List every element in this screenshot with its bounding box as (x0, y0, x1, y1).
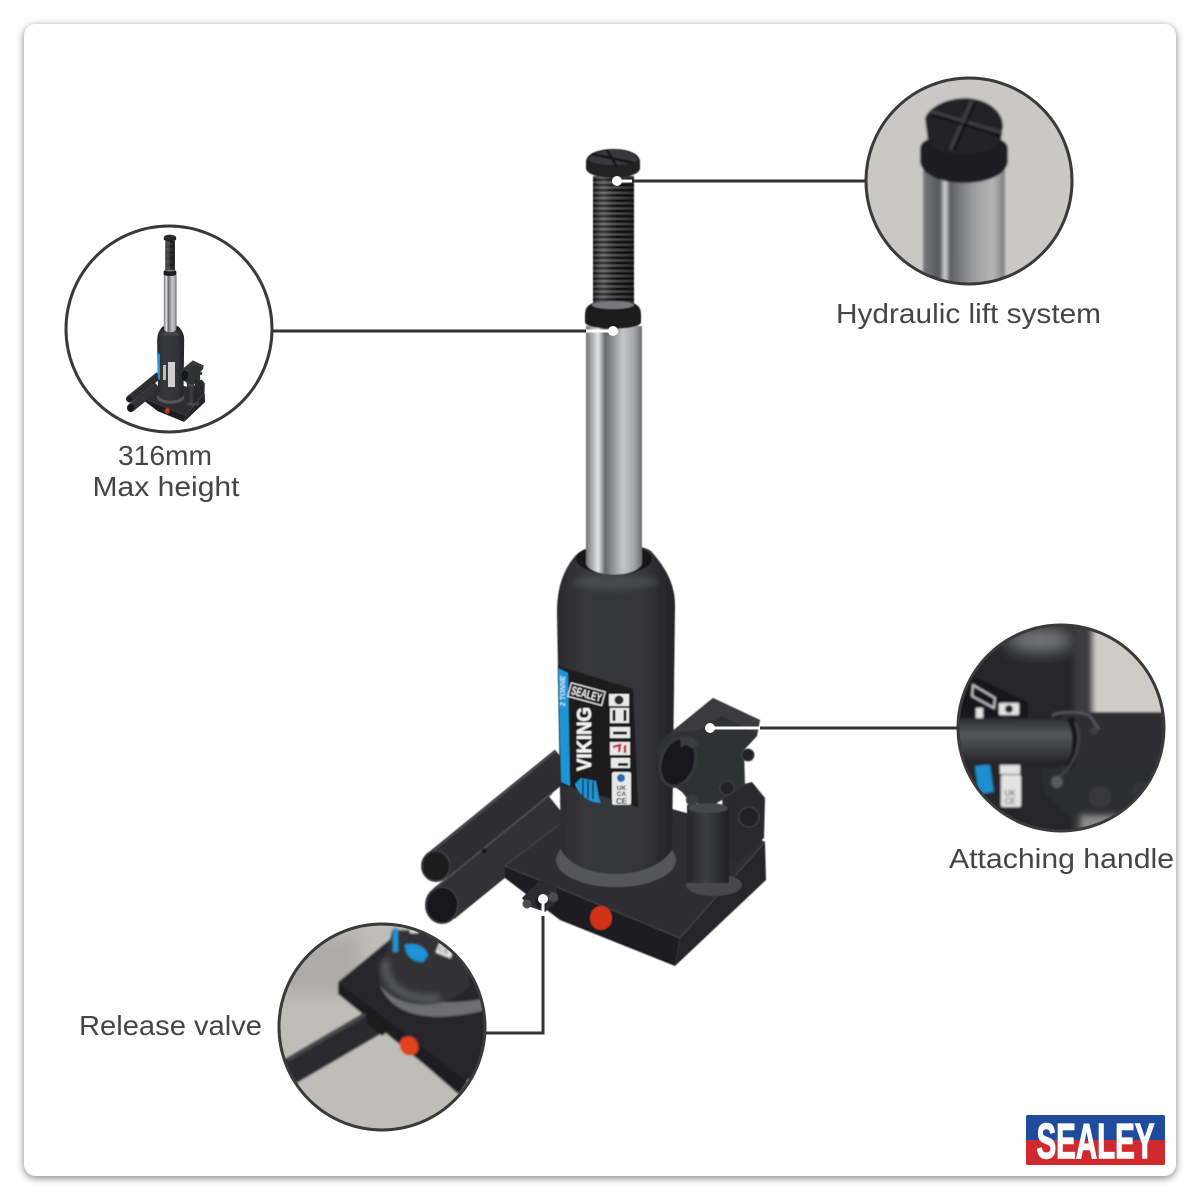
weld ring (556, 833, 676, 887)
base plate (505, 800, 766, 966)
handle tube (289, 1020, 378, 1072)
safety icons: CA (617, 791, 626, 798)
body shoulder highlight (574, 574, 658, 590)
handle socket (657, 698, 760, 806)
safety icons (609, 694, 631, 806)
side link (722, 782, 765, 862)
pump cylinder (687, 805, 729, 883)
zoom circle: release valve (280, 926, 484, 1128)
connector line (618, 180, 866, 182)
small pin (686, 794, 698, 806)
callout: hydraulic lift system (612, 70, 1080, 290)
VIKING logo: VIKING (574, 707, 596, 771)
pivot bolts (720, 749, 759, 827)
marker dot (538, 894, 548, 904)
SEALEY sticker logo: SEALEY (570, 683, 603, 705)
zoom circle: handle socket (960, 626, 1162, 830)
safety icons: UK (617, 785, 626, 792)
jack label (558, 666, 638, 807)
marker dot (608, 326, 618, 336)
safety icons: CE (616, 797, 628, 806)
collar ring (585, 301, 641, 329)
zoom circle: release valve: CE (437, 944, 451, 956)
handle tubes (422, 751, 565, 923)
label: attaching handle: Attaching handle (949, 843, 1174, 874)
connector highlight (617, 180, 632, 182)
callout: attaching handle (705, 620, 1175, 840)
label: 316mm max height (92, 440, 240, 502)
connector highlight (586, 330, 612, 332)
connector line (760, 726, 960, 730)
bottle jack product (422, 149, 766, 966)
label: hydraulic lift system: Hydraulic lift system (836, 298, 1101, 329)
callout: release valve (275, 894, 548, 1135)
ship logo (575, 778, 601, 803)
release valve (522, 880, 559, 912)
connector line (272, 330, 586, 332)
marker dot (612, 176, 622, 186)
weld and cylinder (380, 985, 482, 1018)
marker dot (705, 723, 715, 733)
label: release valve: Release valve (79, 1010, 262, 1041)
pump assembly (654, 698, 765, 883)
label: 316mm max height: 316mm (118, 440, 212, 471)
red plug (398, 1034, 420, 1057)
silver ram (586, 326, 642, 574)
SEALEY sticker logo (568, 683, 605, 705)
small strip text: 2 TONNE (560, 675, 567, 707)
zoom circle: full jack thumbnail (126, 234, 205, 422)
connector highlight (542, 900, 544, 916)
connector highlight (708, 726, 760, 730)
sticker fragments (972, 685, 1021, 807)
ram cap (586, 149, 640, 178)
red oil plug (590, 906, 612, 930)
callout: max height (66, 226, 618, 432)
mechanism below handle (1074, 770, 1154, 825)
sticker fragments: CE (1004, 797, 1016, 806)
sticker fragments: UK (1004, 789, 1016, 798)
label: 316mm max height: Max height (92, 471, 240, 502)
body neck opening (576, 544, 652, 574)
blue strip (558, 668, 570, 786)
zoom circle: jack ram top (868, 80, 1070, 282)
jack main body (557, 544, 675, 874)
threaded screw (593, 176, 634, 306)
connector line (484, 916, 543, 1033)
